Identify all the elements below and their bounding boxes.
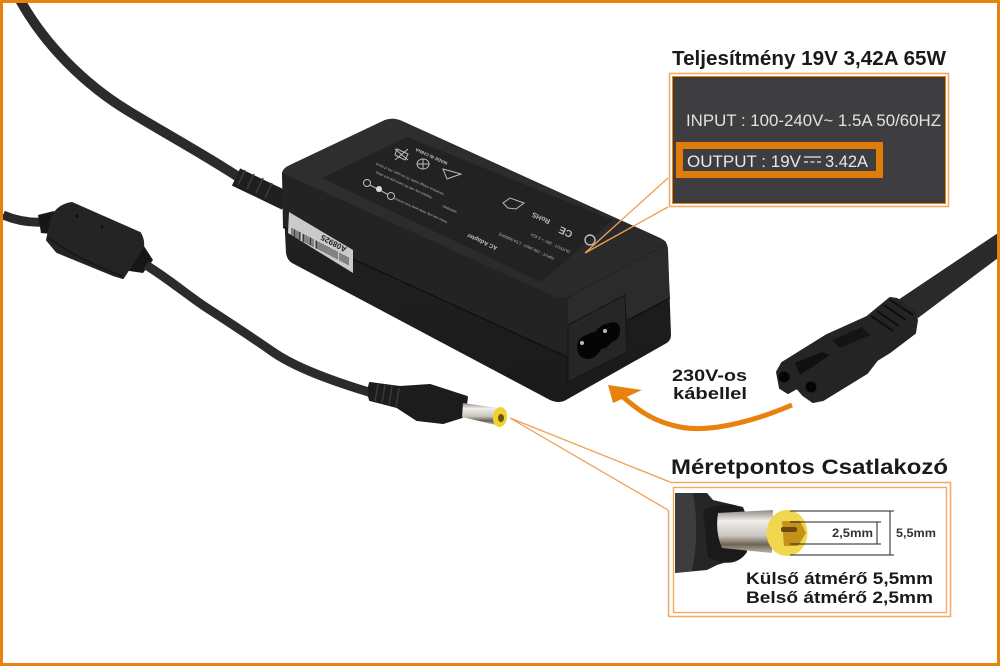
diameter text bbox=[746, 569, 933, 607]
printed markings: OUTPUT : 19V ⎓ 3.42A bbox=[530, 232, 571, 254]
socket holes bbox=[778, 372, 790, 382]
plug grip ribs bbox=[871, 300, 913, 331]
callout lines: output label bbox=[585, 178, 668, 253]
adapter upper side bbox=[282, 173, 568, 358]
adapter body bbox=[282, 119, 671, 402]
input text: INPUT : 100-240V~ 1.5A 50/60HZ bbox=[686, 111, 941, 130]
panel: rating label bbox=[670, 74, 948, 206]
diameter text: Külső átmérő 5,5mm bbox=[746, 569, 933, 588]
groove bbox=[795, 352, 830, 375]
icon: class circle bbox=[417, 159, 429, 169]
icon: polarity bbox=[366, 183, 391, 196]
grip pad bbox=[832, 327, 870, 348]
label recess on top bbox=[322, 137, 613, 282]
icon: house mark bbox=[503, 198, 524, 209]
strain relief left bbox=[38, 211, 54, 234]
printed markings: WARNING bbox=[441, 204, 457, 214]
DC cable with ferrite bbox=[3, 203, 372, 393]
AC socket panel bbox=[568, 295, 627, 382]
heading: connector: Méretpontos Csatlakozó bbox=[671, 456, 948, 479]
yellow tip bbox=[492, 406, 508, 428]
printed markings: Indoor use only. Keep away from moisture. bbox=[391, 196, 448, 224]
adapter end face bbox=[568, 244, 670, 325]
output highlight bbox=[680, 146, 880, 174]
metal barrel bbox=[462, 403, 498, 425]
plug strain relief and barrel bbox=[368, 383, 467, 423]
outer dimension label: 5,5mm bbox=[896, 528, 936, 540]
inner dimension label: 2,5mm bbox=[832, 528, 873, 540]
icon: warning triangle bbox=[443, 169, 461, 179]
label: 230V-os kabellel: kábellel bbox=[673, 384, 747, 403]
dimension lines bbox=[790, 511, 894, 555]
panel: connector dimensions bbox=[668, 482, 950, 616]
C7 plug body bbox=[777, 298, 917, 402]
printed markings: Hazardous voltage inside. Do not open, risk of shock. bbox=[374, 161, 445, 196]
printed markings: RoHS bbox=[531, 210, 552, 224]
callout lines: connector tip bbox=[510, 418, 670, 510]
connector photo bbox=[675, 493, 808, 573]
diameter text: Belső átmérő 2,5mm bbox=[746, 588, 933, 607]
cable left stub bbox=[3, 215, 44, 222]
label: 230V-os kabellel: 230V-os bbox=[672, 366, 747, 385]
socket opening bbox=[577, 322, 620, 359]
printed markings: AC Adapter bbox=[466, 231, 499, 250]
printed markings: MADE IN CHINA bbox=[414, 147, 448, 166]
output text bbox=[687, 152, 869, 171]
label: 230V-os kabellel bbox=[672, 366, 747, 403]
power cord bbox=[777, 233, 998, 402]
printed markings: CE bbox=[557, 223, 575, 239]
printed markings: INPUT : 100-240V~ 1.5A 50/60HZ bbox=[497, 231, 555, 261]
cable: upper left lead into adapter bbox=[20, 0, 286, 201]
adapter top face bbox=[282, 119, 666, 298]
printed markings bbox=[364, 147, 595, 261]
printed markings: Replace only with the same type and rating. bbox=[375, 170, 433, 200]
strain relief right bbox=[123, 240, 153, 273]
seam lines bbox=[283, 227, 670, 357]
output text: OUTPUT : 19V bbox=[687, 152, 802, 171]
sticker with barcode bbox=[288, 212, 353, 273]
flat cable bbox=[898, 233, 998, 318]
output text: 3.42A bbox=[825, 152, 869, 171]
cable run bbox=[146, 265, 372, 393]
icon: bin bbox=[395, 149, 408, 160]
adapter silhouette bbox=[282, 119, 671, 402]
ferrite bead bbox=[47, 203, 143, 278]
sticker with barcode: A08925 bbox=[319, 232, 348, 254]
heading: power rating: Teljesítmény 19V 3,42A 65W bbox=[672, 48, 946, 70]
arrow: orange curved arrow to socket bbox=[608, 385, 792, 429]
DC plug bbox=[368, 383, 508, 428]
icon: recycling bbox=[585, 235, 595, 245]
